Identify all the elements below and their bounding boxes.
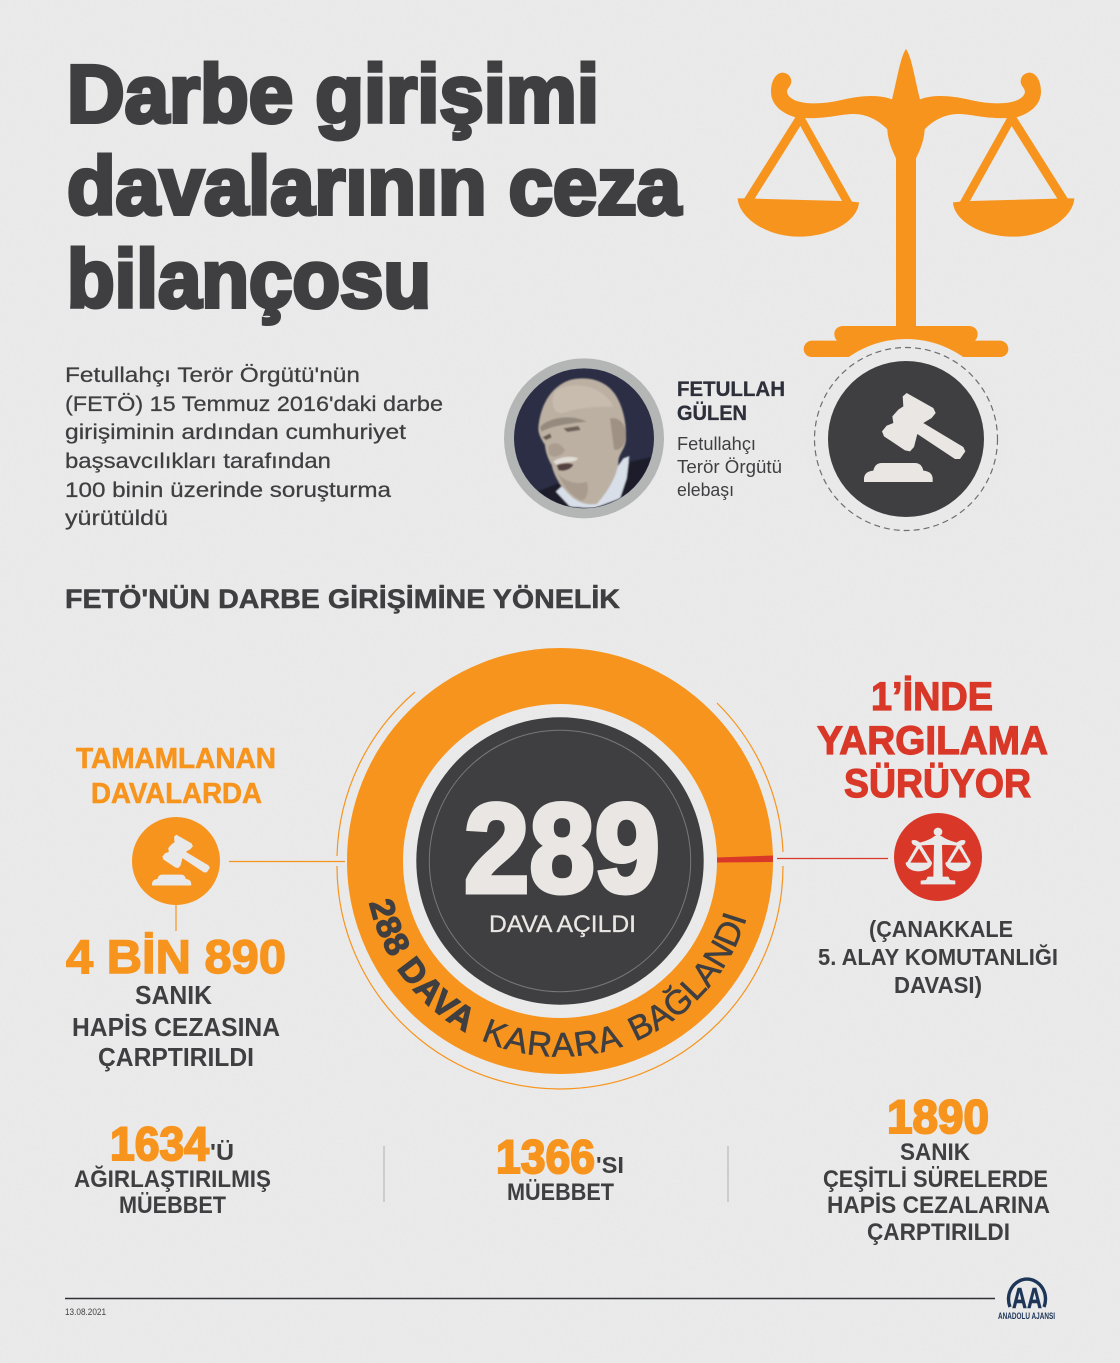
connector: left xyxy=(176,862,345,931)
intro text: (FETÖ) 15 Temmuz 2016'daki darbe xyxy=(65,392,443,416)
logo: Anadolu Ajansı: AA xyxy=(1012,1283,1042,1315)
left stat: HAPİS CEZASINA xyxy=(72,1012,280,1042)
title: davalarının ceza xyxy=(67,141,682,232)
stat: 1890 xyxy=(823,1090,1050,1246)
stat: 1634 xyxy=(74,1117,271,1219)
stat: 1890: 1890 xyxy=(887,1090,989,1143)
date: 13.08.2021 xyxy=(65,1307,106,1317)
left stat: ÇARPTIRILDI xyxy=(98,1042,254,1072)
connector: right xyxy=(777,858,888,860)
portrait photo xyxy=(504,358,664,518)
portrait caption: Fetullahçı xyxy=(677,434,756,454)
stat: 1634: 'Ü xyxy=(210,1139,234,1165)
left heading: TAMAMLANAN xyxy=(76,743,276,775)
total label: DAVA AÇILDI xyxy=(489,911,636,938)
right note: DAVASI) xyxy=(894,972,982,998)
stat: 1890: ÇEŞİTLİ SÜRELERDE xyxy=(823,1166,1048,1193)
title: Darbe girişimi xyxy=(67,49,599,140)
icon: large orange scales xyxy=(738,49,1074,357)
portrait caption: GÜLEN xyxy=(677,402,747,425)
title xyxy=(67,49,682,325)
right note: (ÇANAKKALE xyxy=(869,916,1013,942)
stat: 1366: 1366 xyxy=(496,1130,595,1183)
total number: 289 xyxy=(464,778,660,919)
stat: 1634: AĞIRLAŞTIRILMIŞ xyxy=(74,1165,271,1193)
right heading: YARGILAMA xyxy=(817,719,1048,763)
curved ring text xyxy=(368,898,746,1057)
portrait caption: Terör Örgütü xyxy=(677,457,782,477)
curved ring text: KARARA xyxy=(482,1018,624,1057)
intro text: başsavcılıkları tarafından xyxy=(65,449,331,473)
right heading xyxy=(817,675,1048,806)
icon: gavel badge xyxy=(806,339,1006,539)
left heading: DAVALARDA xyxy=(91,778,262,810)
intro text: yürütüldü xyxy=(65,506,168,530)
stat: 1366: MÜEBBET xyxy=(507,1179,614,1206)
portrait caption xyxy=(677,378,785,500)
stat: 1890: HAPİS CEZALARINA xyxy=(827,1192,1050,1219)
left stat: SANIK xyxy=(135,980,212,1010)
intro text xyxy=(65,363,443,530)
right heading: 1’İNDE xyxy=(871,675,993,719)
right note xyxy=(818,916,1058,998)
logo: Anadolu Ajansı xyxy=(998,1279,1055,1321)
icon: orange gavel xyxy=(132,817,220,905)
left heading xyxy=(76,743,276,810)
right note: 5. ALAY KOMUTANLIĞI xyxy=(818,943,1058,970)
portrait caption: FETULLAH xyxy=(677,378,785,401)
intro text: girişiminin ardından cumhuriyet xyxy=(65,420,406,444)
curved ring text: BAĞLANDI xyxy=(627,912,746,1041)
stat: 1634: 1634 xyxy=(110,1117,209,1170)
dark centre xyxy=(416,717,704,1005)
orange ring xyxy=(375,676,745,1046)
section heading: FETÖ'NÜN DARBE GİRİŞİMİNE YÖNELİK xyxy=(65,584,621,614)
left stat xyxy=(66,930,286,1072)
title: bilançosu xyxy=(67,234,431,325)
stat: 1366 xyxy=(496,1130,624,1206)
stat: 1366: 'SI xyxy=(596,1152,624,1178)
intro text: 100 binin üzerinde soruşturma xyxy=(65,478,391,502)
red segment xyxy=(717,856,773,862)
portrait caption: elebaşı xyxy=(677,480,734,500)
left stat: 4 BİN 890 xyxy=(66,930,286,983)
outer thin arcs xyxy=(337,692,783,1089)
icon: red scales xyxy=(894,813,982,901)
central ring chart xyxy=(336,648,784,1090)
logo: Anadolu Ajansı: ANADOLU AJANSI xyxy=(998,1311,1055,1321)
stat: 1890: SANIK xyxy=(900,1139,971,1166)
curved ring text: 288 DAVA xyxy=(368,898,471,1034)
right heading: SÜRÜYOR xyxy=(844,761,1031,806)
stat: 1890: ÇARPTIRILDI xyxy=(867,1219,1010,1246)
stat: 1634: MÜEBBET xyxy=(119,1192,226,1219)
intro text: Fetullahçı Terör Örgütü'nün xyxy=(65,363,360,387)
